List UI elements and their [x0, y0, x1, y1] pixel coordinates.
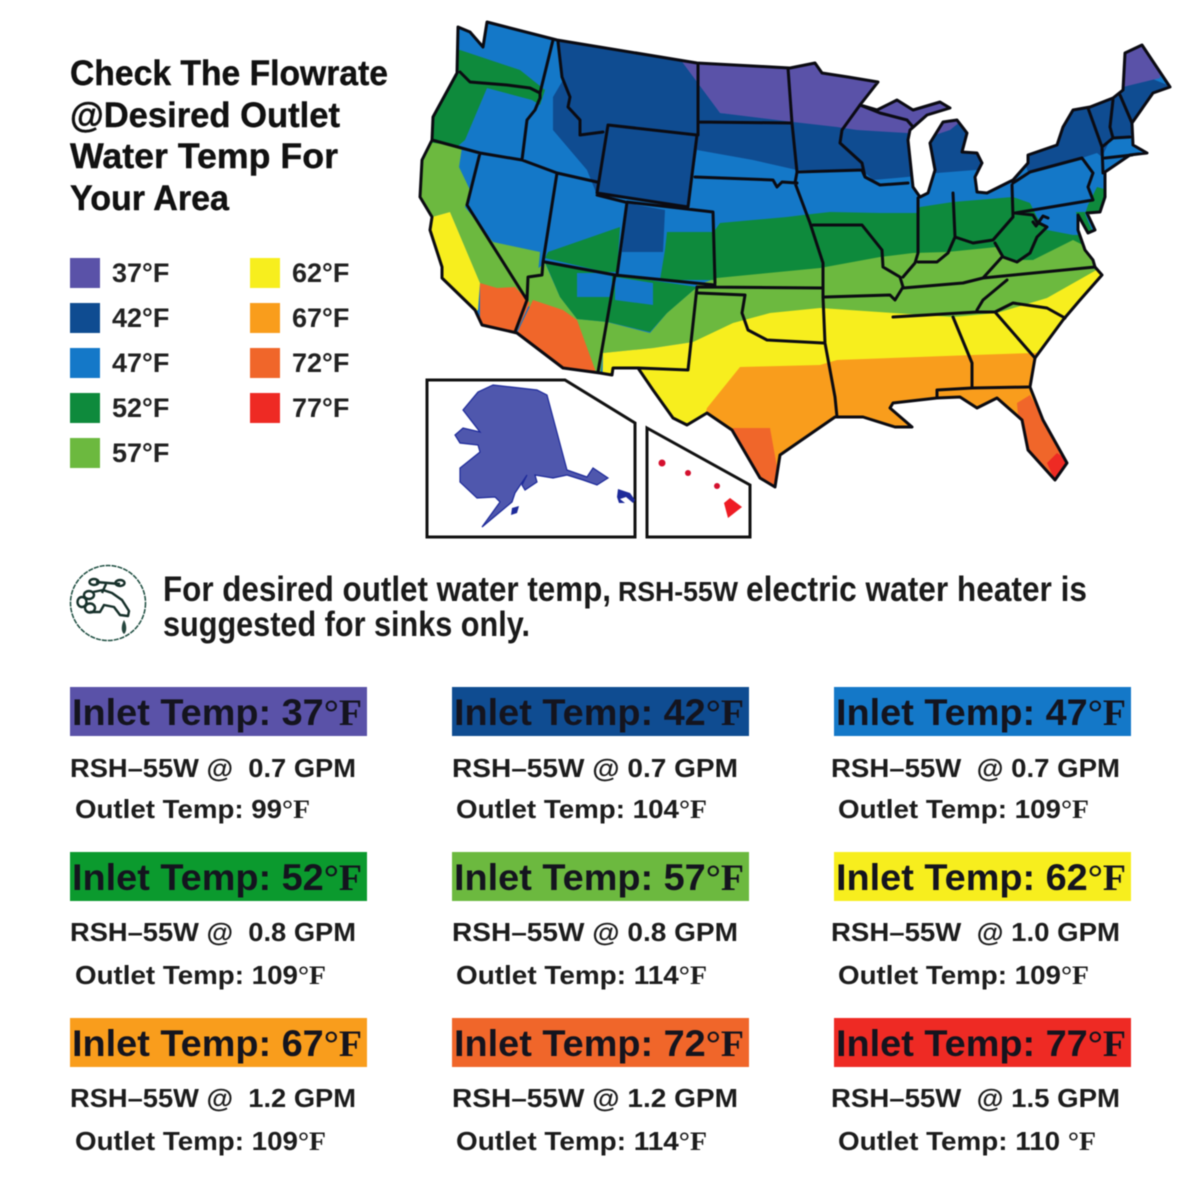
legend: temperature colours [70, 258, 349, 468]
legend: temperature colours: 37°F [112, 258, 169, 288]
card: inlet 37F: Outlet Temp: 99 °F [75, 794, 310, 824]
card: inlet 67F [70, 1018, 367, 1156]
card: inlet 72F: Inlet Temp: 72°F [454, 1023, 744, 1065]
card: inlet 52F: RSH–55W @ 0.8 GPM [70, 917, 356, 947]
heading: check the flowrate [70, 54, 388, 218]
card: inlet 57F [452, 852, 749, 990]
card: inlet 77F: RSH–55W @ 1.5 GPM [831, 1083, 1120, 1113]
card: inlet 42F: Outlet Temp: 104 °F [456, 794, 707, 824]
card: inlet 47F: Outlet Temp: 109 °F [838, 794, 1089, 824]
card: inlet 37F [70, 687, 367, 824]
note: suggested for sinks only: electric water heater is [746, 570, 1087, 609]
note: suggested for sinks only: For desired outlet water temp, [163, 570, 611, 609]
card: inlet 62F: RSH–55W @ 1.0 GPM [831, 917, 1120, 947]
card: inlet 42F: RSH–55W @ 0.7 GPM [452, 753, 738, 783]
card: inlet 57F: RSH–55W @ 0.8 GPM [452, 917, 738, 947]
card: inlet 72F: Outlet Temp: 114 °F [456, 1126, 707, 1156]
note: suggested for sinks only [163, 570, 1087, 644]
map: state border lines [420, 22, 1170, 487]
legend: temperature colours: 42°F [112, 303, 169, 333]
card: inlet 57F: Inlet Temp: 57°F [454, 857, 744, 899]
card: inlet 47F: RSH–55W @ 0.7 GPM [831, 753, 1120, 783]
card: inlet 67F: RSH–55W @ 1.2 GPM [70, 1083, 356, 1113]
legend: temperature colours: 67°F [292, 303, 349, 333]
card: inlet 77F: Inlet Temp: 77°F [836, 1023, 1126, 1065]
card: inlet 72F: RSH–55W @ 1.2 GPM [452, 1083, 738, 1113]
heading: check the flowrate: Check The Flowrate [70, 54, 388, 93]
heading: check the flowrate: Water Temp For [70, 137, 338, 176]
card: inlet 67F: Outlet Temp: 109 °F [75, 1126, 326, 1156]
legend: temperature colours: 47°F [112, 348, 169, 378]
heading: check the flowrate: @Desired Outlet [70, 96, 340, 135]
card: inlet 42F [452, 687, 749, 824]
legend: temperature colours: 72°F [292, 348, 349, 378]
card: inlet 62F: Inlet Temp: 62°F [836, 857, 1126, 899]
inset: Hawaii [647, 428, 750, 537]
note: suggested for sinks only: suggested for sinks only. [163, 605, 530, 644]
card: inlet 62F: Outlet Temp: 109 °F [838, 960, 1089, 990]
card: inlet 52F: Outlet Temp: 109 °F [75, 960, 326, 990]
legend: temperature colours: 57°F [112, 438, 169, 468]
heading: check the flowrate: Your Area [70, 179, 230, 218]
card: inlet 42F: Inlet Temp: 42°F [454, 692, 744, 734]
icon: faucet [70, 566, 146, 640]
legend: temperature colours: 77°F [292, 393, 349, 423]
note: suggested for sinks only: RSH-55W [618, 576, 739, 607]
card: inlet 47F: Inlet Temp: 47°F [836, 692, 1126, 734]
inset: Alaska [427, 380, 635, 537]
card: inlet 52F: Inlet Temp: 52°F [72, 857, 362, 899]
card: inlet 52F [70, 852, 367, 990]
legend: temperature colours: 52°F [112, 393, 169, 423]
card: inlet 57F: Outlet Temp: 114 °F [456, 960, 707, 990]
legend: temperature colours: 62°F [292, 258, 349, 288]
card: inlet 62F [831, 852, 1131, 990]
card: inlet 77F [831, 1018, 1131, 1156]
card: inlet 37F: Inlet Temp: 37°F [72, 692, 362, 734]
map: contiguous US temperature zones [410, 15, 1200, 500]
card: inlet 72F [452, 1018, 749, 1156]
card: inlet 67F: Inlet Temp: 67°F [72, 1023, 362, 1065]
card: inlet 37F: RSH–55W @ 0.7 GPM [70, 753, 356, 783]
card: inlet 77F: Outlet Temp: 110 °F [838, 1126, 1096, 1156]
card: inlet 47F [831, 687, 1131, 824]
